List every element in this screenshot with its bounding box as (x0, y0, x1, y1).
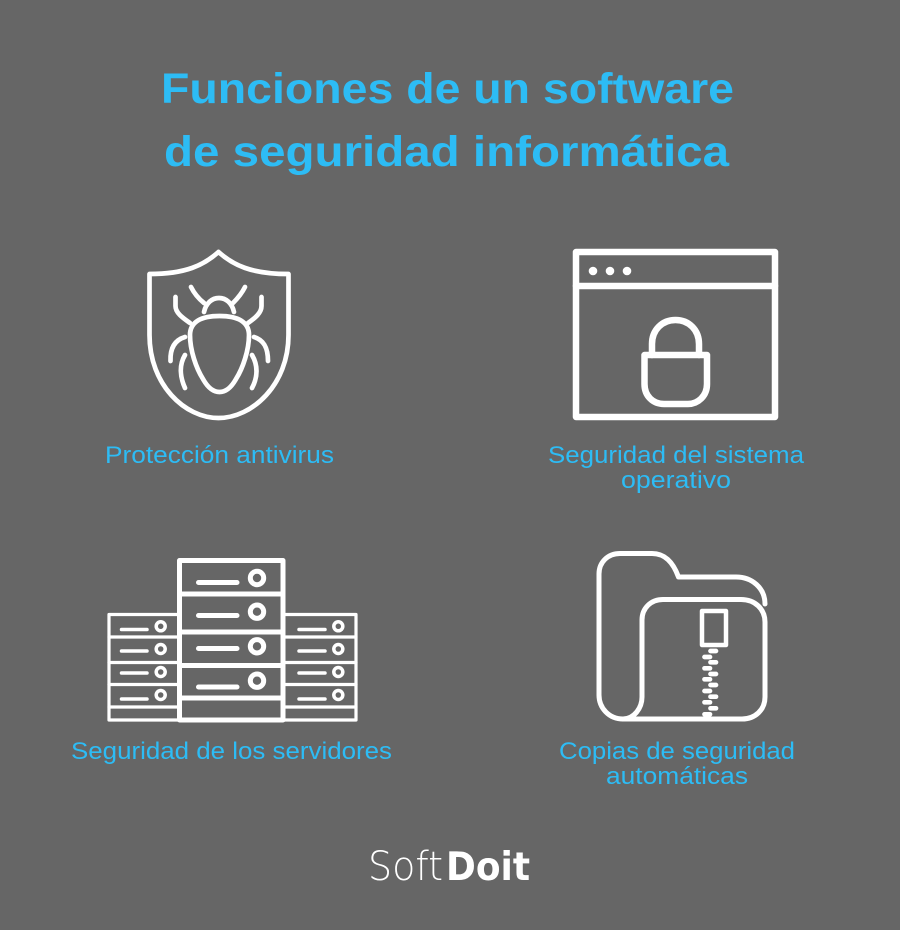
icon: zipped folder (599, 554, 765, 719)
label: sistema operativo (548, 442, 805, 494)
title: Funciones de un software (161, 65, 734, 113)
title (161, 65, 734, 176)
label: copias de seguridad: Copias de seguridad (559, 738, 795, 765)
label: copias de seguridad: automáticas (606, 763, 748, 790)
icon: server racks (109, 560, 356, 720)
logo: SoftDoit (368, 844, 530, 890)
logo: SoftDoit: Soft (368, 844, 443, 890)
icon: browser window with padlock (576, 252, 775, 417)
label: servidores: Seguridad de los servidores (71, 738, 392, 765)
icon: shield with bug (150, 252, 288, 418)
label: antivirus: Protección antivirus (105, 442, 334, 469)
label: copias de seguridad (559, 738, 795, 790)
title: de seguridad informática (164, 128, 730, 176)
label: sistema operativo: Seguridad del sistema (548, 442, 805, 469)
logo: SoftDoit: Doit (446, 845, 530, 890)
label: sistema operativo: operativo (621, 467, 731, 494)
